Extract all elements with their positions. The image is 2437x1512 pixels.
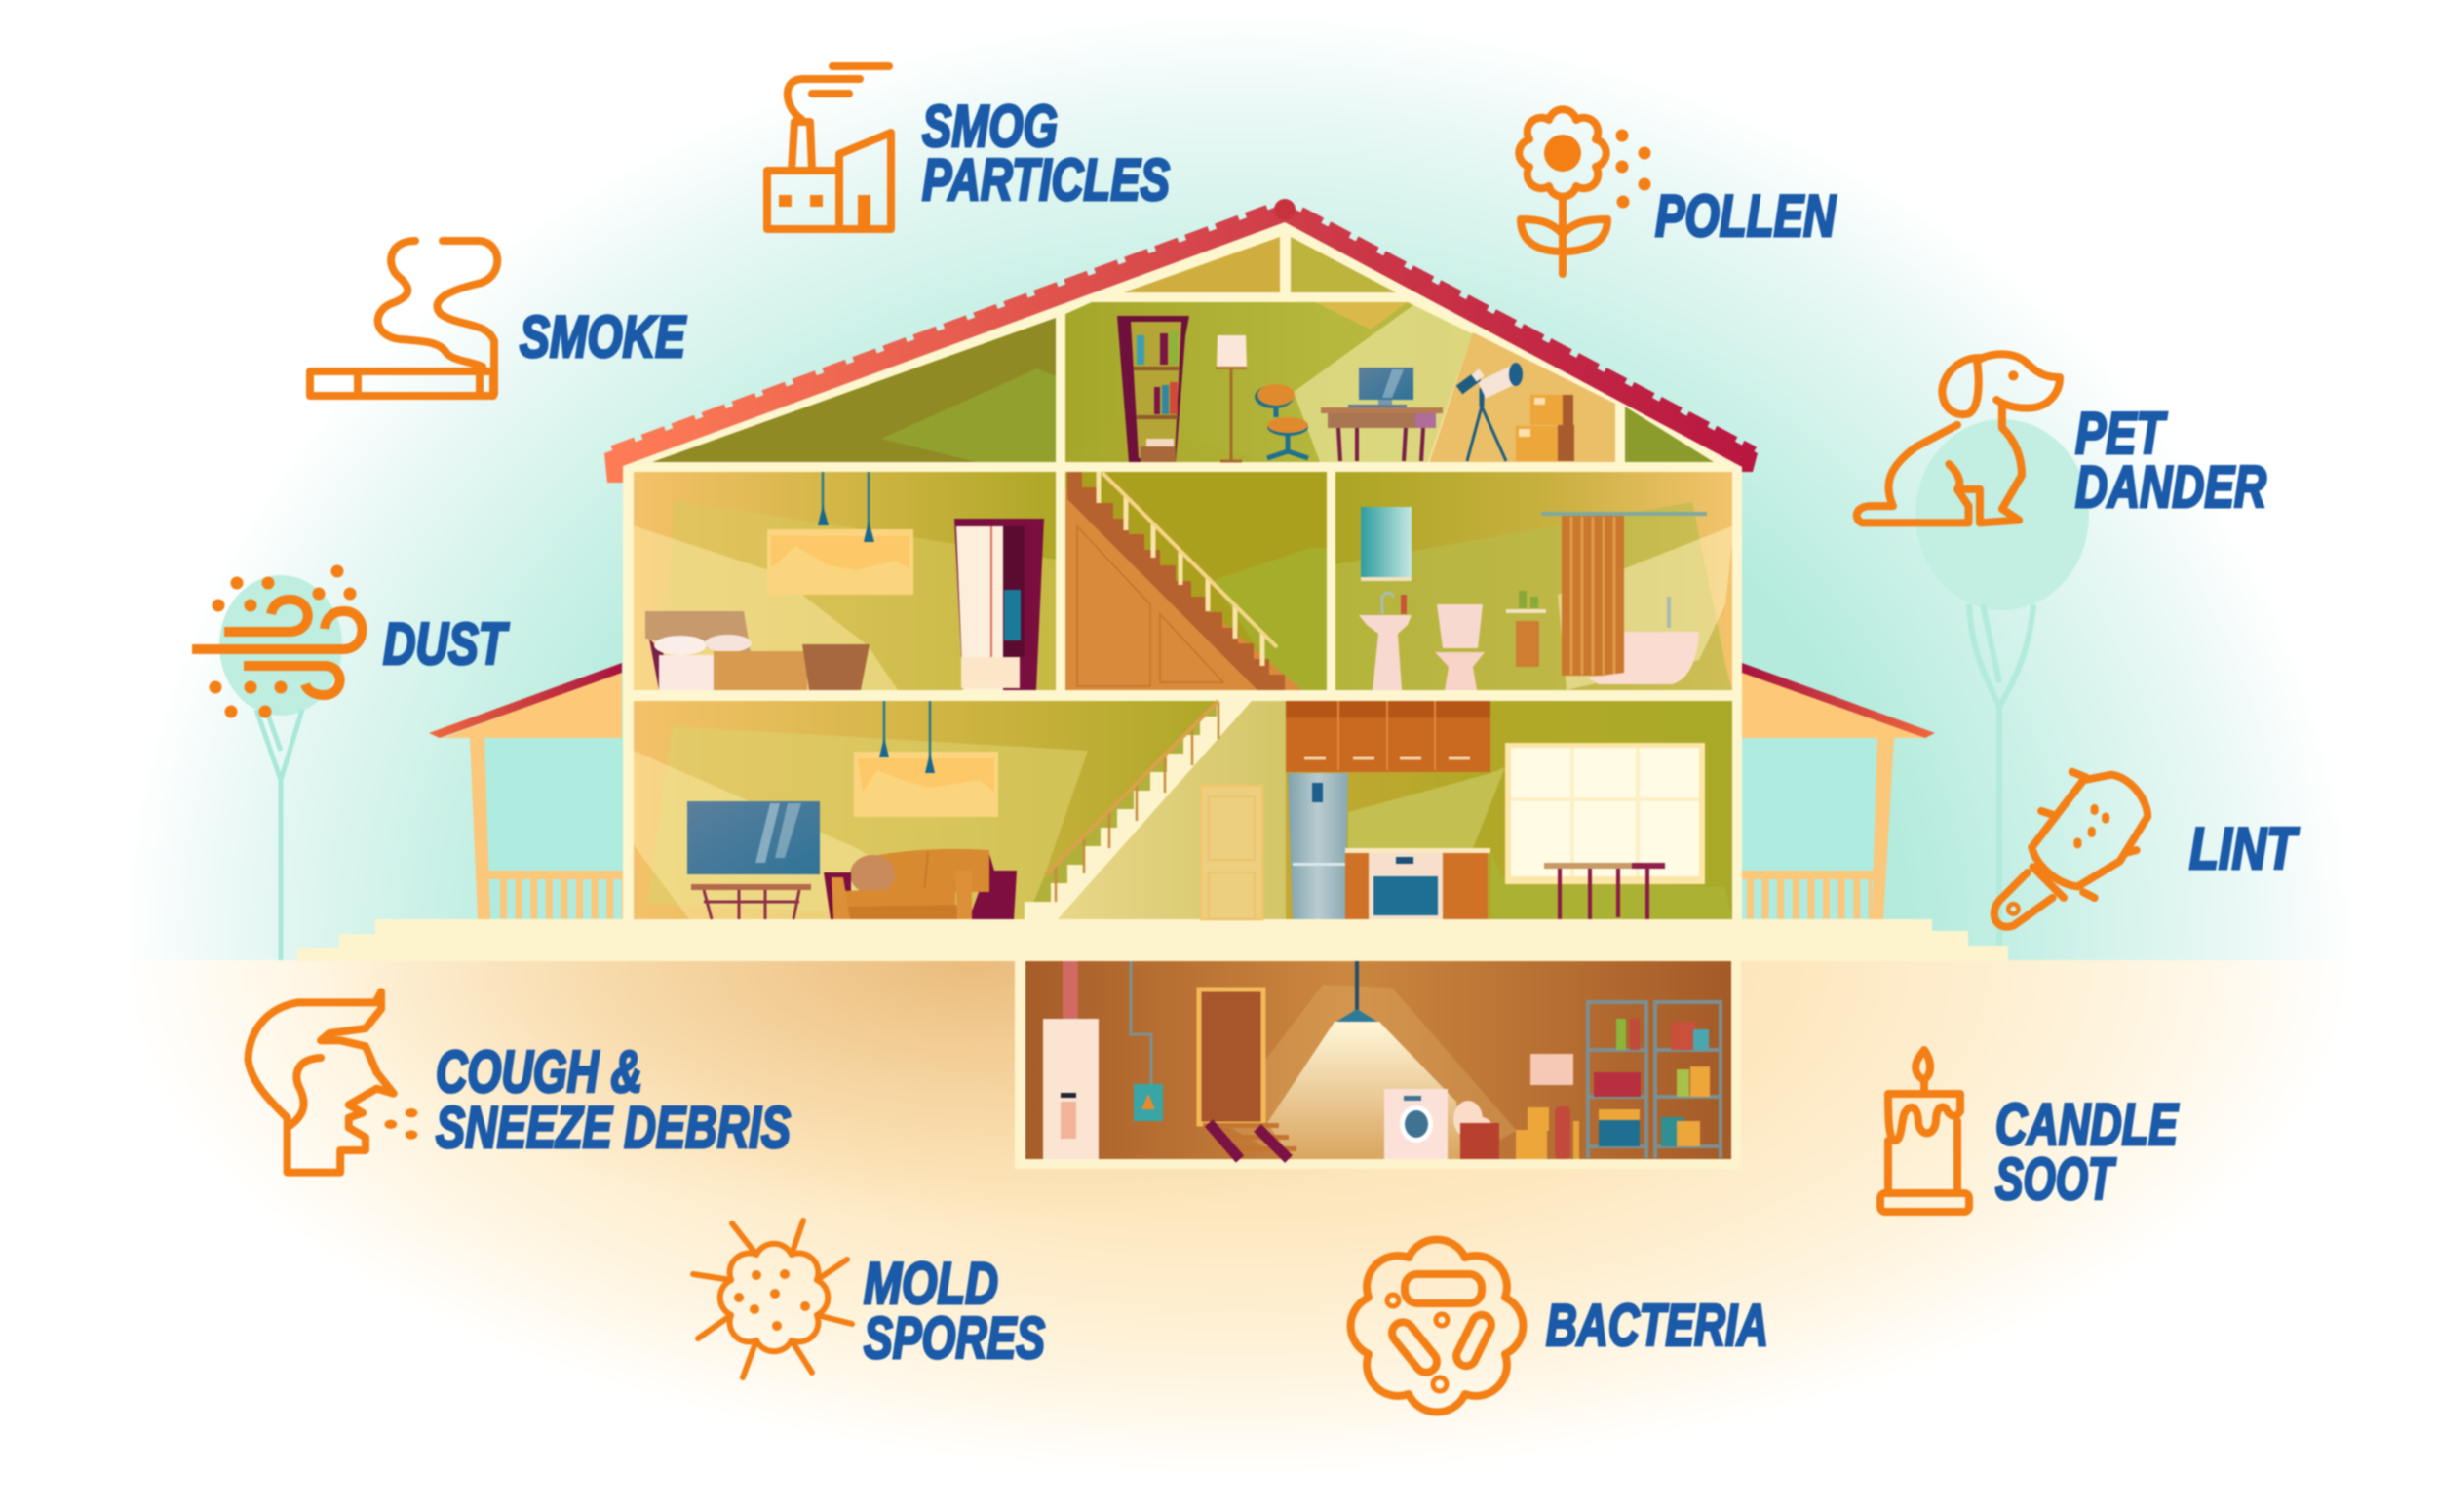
right tree	[1915, 419, 2089, 948]
icon: mold spore	[693, 1221, 852, 1377]
label: smog particles: PARTICLES	[922, 147, 1170, 213]
left tree	[219, 575, 342, 960]
label: cough and sneeze debris: COUGH &	[436, 1039, 642, 1105]
sofa	[824, 849, 1017, 919]
item: mold spores	[693, 1221, 1045, 1377]
basement stairs	[1203, 1123, 1296, 1159]
icon: flower with pollen	[1519, 109, 1651, 274]
pendant lights	[818, 472, 874, 542]
label: smog particles: SMOG	[922, 94, 1058, 159]
icon: lint roller	[1994, 772, 2147, 927]
roof	[604, 199, 1758, 483]
foundation slab	[297, 919, 2008, 961]
gable attic right triangle	[1291, 237, 1396, 292]
fire extinguisher and boxes	[1516, 1106, 1579, 1159]
TV stand	[691, 884, 811, 919]
door	[1199, 989, 1263, 1124]
sink	[1359, 593, 1412, 690]
label: lint: LINT	[2189, 816, 2300, 881]
label: dust: DUST	[383, 611, 509, 677]
left porch	[429, 663, 623, 919]
wall picture	[854, 752, 998, 817]
label: pet dander	[2075, 401, 2266, 520]
icon: candle	[1880, 1050, 1969, 1212]
wardrobe	[954, 519, 1044, 690]
icon: cigarette with smoke	[310, 241, 497, 396]
label: pet dander: DANDER	[2075, 454, 2266, 520]
label: mold spores	[864, 1251, 1045, 1371]
mirror	[1361, 507, 1412, 581]
fridge	[1288, 773, 1348, 919]
desk	[1321, 407, 1443, 461]
label: pollen: POLLEN	[1655, 183, 1837, 249]
icon: sitting dog	[1857, 354, 2060, 523]
background: aqua sky glow	[0, 0, 2437, 960]
desktop monitor	[1348, 368, 1413, 407]
label: bacteria: BACTERIA	[1546, 1293, 1768, 1358]
counter and oven	[1345, 848, 1490, 919]
ceiling lamp	[1336, 961, 1377, 1022]
label: candle soot	[1995, 1092, 2179, 1212]
house frame	[623, 222, 1742, 919]
cardboard boxes	[1516, 395, 1574, 461]
item: smoke	[310, 241, 687, 396]
background: orange ground glow	[0, 960, 2437, 1512]
bed	[645, 611, 870, 690]
basement	[1015, 955, 1741, 1169]
item: lint	[1994, 772, 2300, 927]
house	[297, 199, 2008, 1169]
pendant lights	[879, 701, 935, 773]
label: candle soot: CANDLE	[1995, 1092, 2179, 1157]
right attic void	[1625, 407, 1714, 462]
kitchen	[1286, 701, 1732, 919]
radiator and rags	[1453, 1101, 1499, 1159]
item: pollen	[1519, 109, 1837, 274]
electrical panel	[1131, 961, 1163, 1121]
label: mold spores: SPORES	[864, 1305, 1045, 1371]
stair room	[1065, 472, 1327, 690]
gable attic left triangle	[1124, 237, 1280, 292]
living room	[634, 701, 1252, 919]
shower curtain	[1541, 514, 1707, 676]
label: smog particles	[922, 94, 1170, 213]
item: bacteria	[1351, 1240, 1768, 1412]
item: cough and sneeze debris	[248, 991, 791, 1173]
hallway behind stairs	[1025, 701, 1286, 919]
attic study room	[1065, 302, 1615, 462]
telescope	[1459, 363, 1523, 461]
icon: bacteria	[1351, 1240, 1523, 1412]
floor lamp	[1216, 335, 1247, 461]
item: dust	[192, 565, 509, 717]
wall calendar	[1530, 1054, 1573, 1085]
water heater	[1043, 961, 1099, 1159]
dining table	[1544, 863, 1665, 919]
item: smog particles	[767, 66, 1170, 229]
right porch	[1742, 663, 1935, 919]
label: candle soot: SOOT	[1995, 1146, 2116, 1212]
left attic void	[652, 318, 1056, 462]
TV	[687, 801, 820, 874]
label: smoke: SMOKE	[520, 304, 687, 369]
toilet	[1435, 604, 1485, 690]
light cone	[1218, 985, 1517, 1159]
cabinets	[1286, 701, 1490, 772]
label: mold spores: MOLD	[864, 1251, 998, 1316]
icon: wind and dust	[192, 565, 363, 717]
wall picture	[767, 529, 913, 595]
window	[1505, 743, 1705, 884]
stair flight	[1025, 701, 1252, 919]
label: cough and sneeze debris	[436, 1039, 791, 1160]
icon: head coughing	[248, 991, 417, 1173]
storage shelves	[1588, 1002, 1721, 1158]
label: pet dander: PET	[2075, 401, 2167, 466]
bathtub	[1587, 597, 1699, 684]
bathroom	[1335, 472, 1734, 690]
door	[1201, 786, 1262, 919]
item: candle soot	[1880, 1050, 2179, 1212]
office chair	[1255, 384, 1308, 458]
washing machine	[1384, 1089, 1448, 1159]
bookshelf	[1117, 316, 1189, 462]
towel rack	[1506, 591, 1546, 667]
label: cough and sneeze debris: SNEEZE DEBRIS	[436, 1095, 791, 1160]
item: pet dander	[1857, 354, 2266, 523]
bedroom	[633, 472, 1056, 690]
icon: factory with smog	[767, 66, 891, 229]
